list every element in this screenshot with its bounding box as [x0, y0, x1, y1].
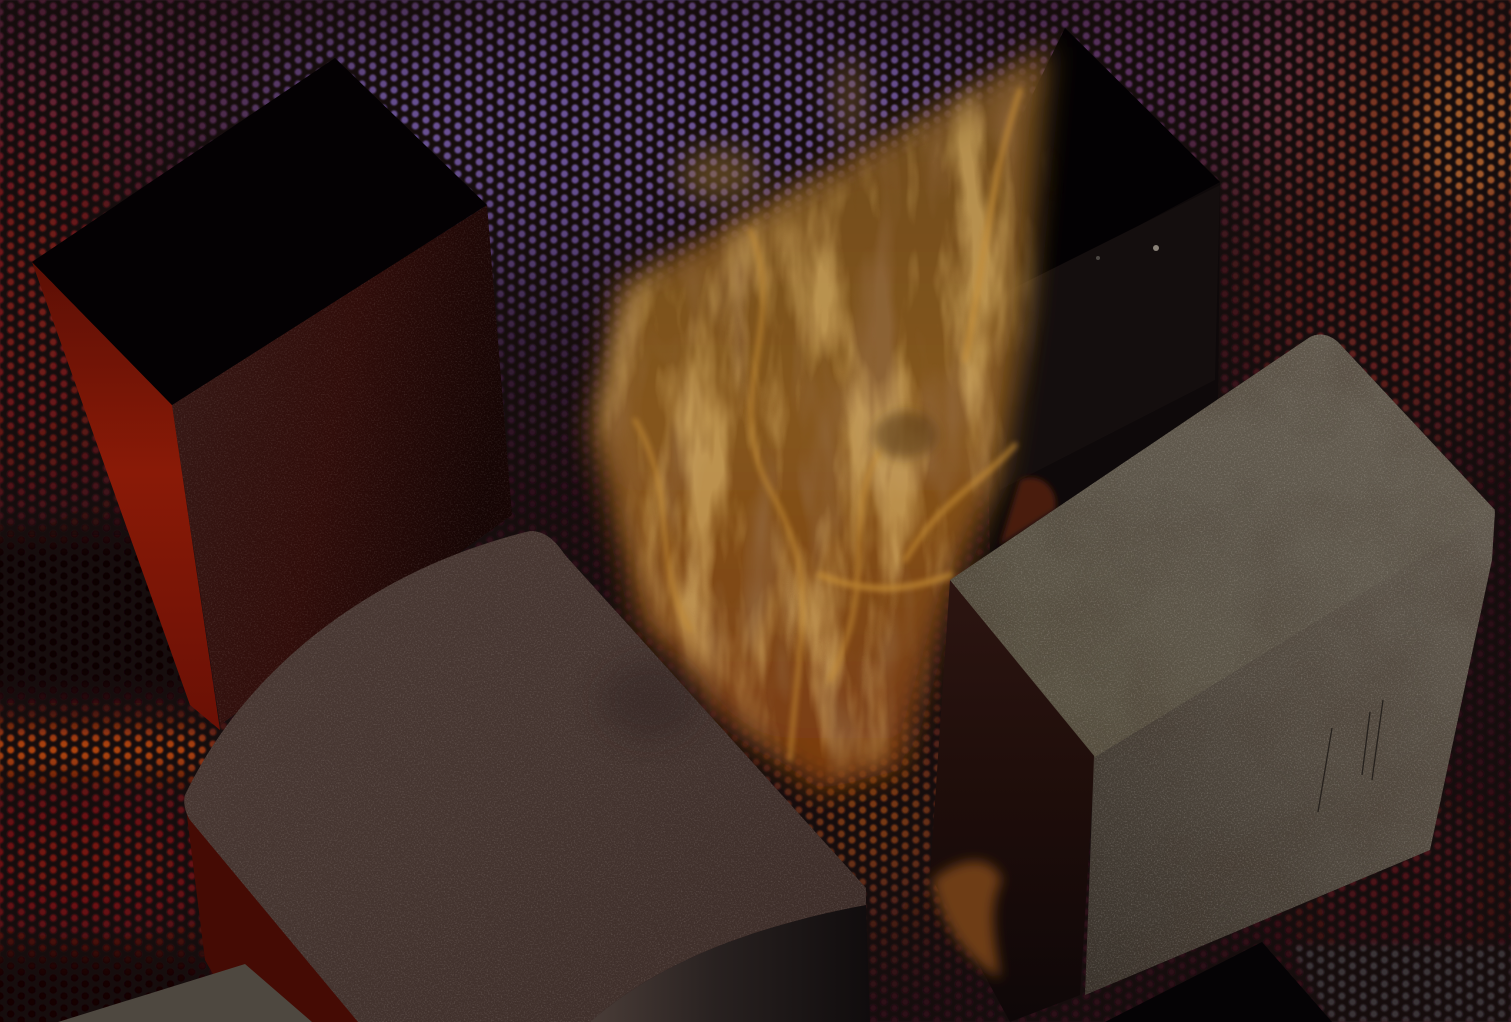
flame	[592, 45, 1056, 790]
brick: rear dark block	[985, 28, 1220, 560]
brick: black foreground corner	[1105, 942, 1332, 1022]
lower flame lick	[932, 861, 1002, 978]
dark left face	[930, 580, 1095, 1022]
brick: arched block, side shadow	[185, 800, 360, 1022]
brick: arched block, curved face	[183, 530, 868, 1022]
brick: arched block, end face	[590, 905, 870, 1022]
stone side face	[1085, 511, 1495, 995]
black top face	[32, 58, 487, 405]
brick: pale stone block	[930, 330, 1500, 1022]
front face	[172, 205, 512, 725]
brick: small grey foreground corner	[58, 964, 312, 1022]
red side face	[32, 262, 220, 730]
brick: tall black-topped block	[32, 58, 515, 730]
stone top face	[950, 335, 1495, 757]
